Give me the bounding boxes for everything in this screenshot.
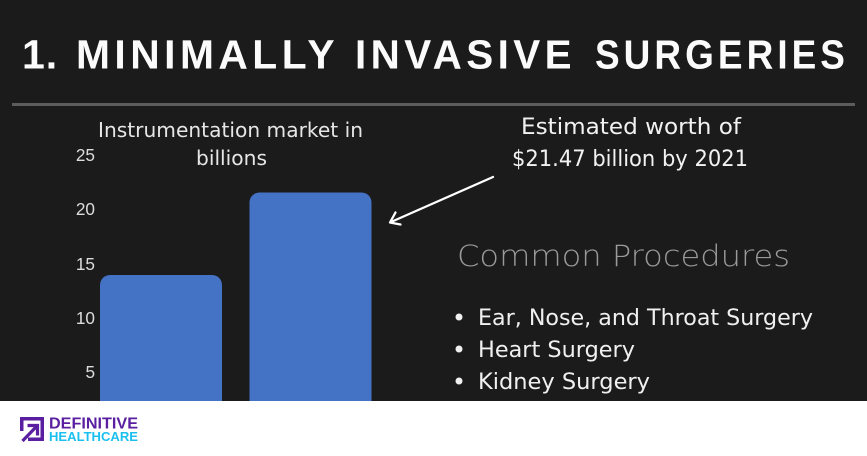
y axis labels: 25 <box>76 145 95 165</box>
logo: Definitive Healthcare <box>20 416 138 444</box>
y axis labels: 10 <box>76 308 95 328</box>
chart title: Instrumentation market in <box>98 118 363 142</box>
list: procedures: Heart Surgery <box>478 338 635 363</box>
logo text: DEFINITIVE <box>49 416 138 432</box>
chart title <box>98 118 363 170</box>
title: MINIMALLY <box>76 32 339 78</box>
y axis labels: 5 <box>85 362 95 382</box>
logo text <box>49 416 138 444</box>
list: procedures: Ear, Nose, and Throat Surgery <box>478 306 813 331</box>
list: procedures: Kidney Surgery <box>478 370 650 395</box>
chart: instrumentation market <box>76 118 372 418</box>
callout: estimated worth: Estimated worth of <box>521 114 742 140</box>
y axis labels: 20 <box>76 199 95 219</box>
heading: common procedures: Common Procedures <box>457 239 790 273</box>
callout: estimated worth: $21.47 billion by 2021 <box>512 146 748 172</box>
title: INVASIVE <box>355 32 576 78</box>
bar: first <box>100 275 222 415</box>
chart title: billions <box>196 146 267 170</box>
list: procedures <box>456 306 813 395</box>
arrow <box>390 177 493 224</box>
logo text: HEALTHCARE <box>49 429 138 444</box>
bar: second <box>250 192 372 418</box>
y axis labels <box>76 145 95 382</box>
title: 1. <box>22 32 58 78</box>
footer band <box>0 401 867 456</box>
y axis labels: 15 <box>76 254 95 274</box>
icon: square arrow <box>20 417 44 441</box>
callout: estimated worth <box>512 114 748 172</box>
